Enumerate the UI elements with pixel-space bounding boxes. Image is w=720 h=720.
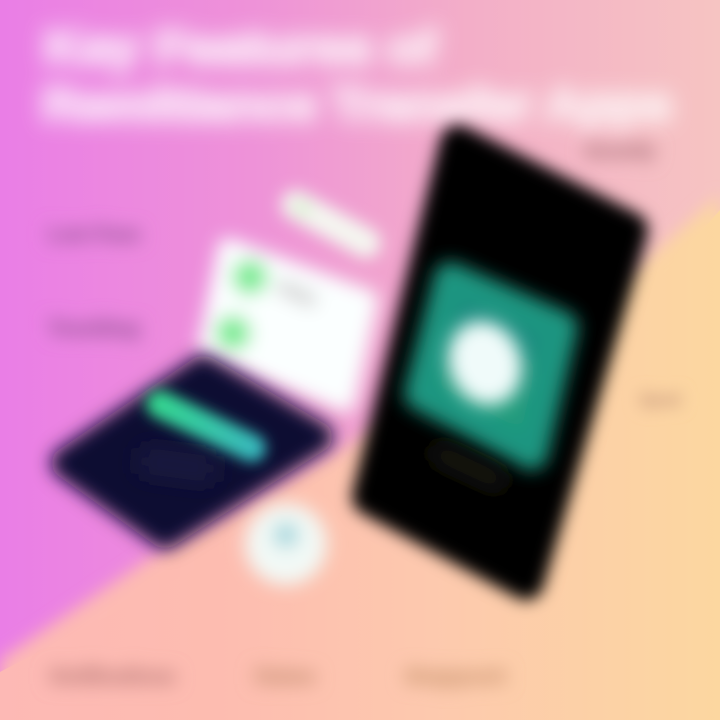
label: top right: Security: [585, 141, 655, 161]
white pill tag: [292, 198, 366, 243]
white card with check list: [208, 248, 368, 402]
teal app icon: [420, 278, 562, 454]
label: bottom left: Notifications: [50, 666, 175, 688]
icon: green dot lower: [215, 315, 251, 351]
round check badge: [245, 503, 327, 585]
small dark phone: [66, 370, 318, 534]
white circle in icon: [436, 310, 534, 416]
title: Remittance Transfer Apps: [42, 78, 672, 130]
caption under icon: [432, 450, 505, 484]
label: right: Speed: [640, 392, 680, 409]
green action bar: [160, 404, 252, 448]
label: left lower: Tracking: [48, 318, 140, 340]
title: Key Features of: [44, 21, 437, 73]
title: [42, 21, 672, 130]
label: bottom right: Support: [405, 666, 505, 688]
icon: green dot upper: [232, 259, 268, 295]
label: left upper: Low Fees: [48, 224, 140, 246]
background: peach diagonal band: [0, 195, 720, 720]
large black phone: [370, 143, 630, 582]
label: bottom center: Rates: [255, 666, 315, 688]
